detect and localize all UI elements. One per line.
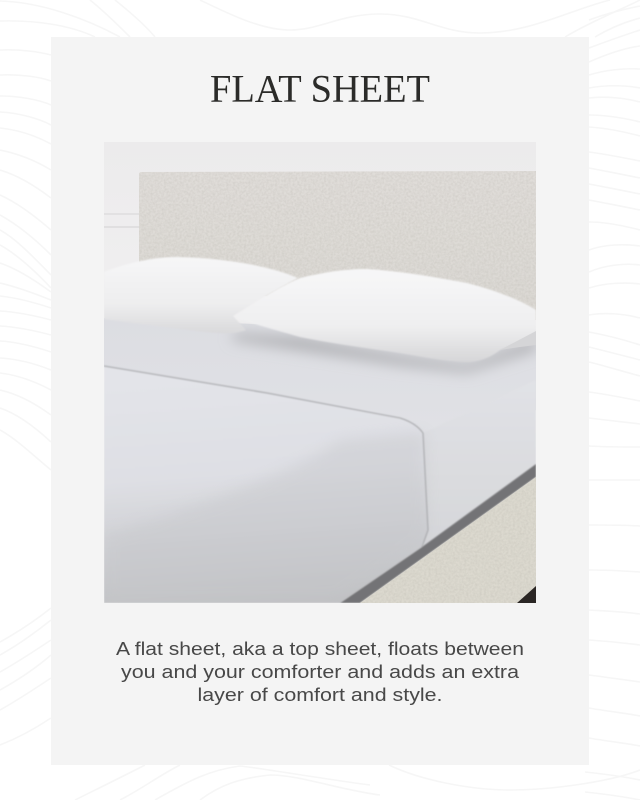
photo: bed with flat sheet	[104, 142, 536, 603]
description text: you and your comforter and adds an extra	[121, 662, 520, 682]
pillow shadow	[233, 333, 536, 372]
bed base	[360, 477, 536, 603]
description text	[116, 639, 524, 705]
dark gap under mattress	[340, 464, 536, 603]
bed top surface	[104, 318, 536, 432]
wall with moulding	[104, 142, 536, 228]
headboard	[139, 171, 536, 320]
pillowcase fold	[506, 331, 536, 349]
panel: light grey card	[51, 37, 589, 765]
dark floor corner	[517, 586, 536, 603]
flat sheet hem line	[104, 366, 428, 547]
description text: layer of comfort and style.	[198, 685, 442, 705]
title: FLAT SHEET	[210, 66, 430, 110]
sheet front surface	[104, 366, 428, 603]
right pillow	[235, 269, 536, 362]
sheet fold shading	[240, 436, 422, 502]
left pillow	[104, 257, 298, 333]
sheet side drop	[424, 410, 536, 546]
description text: A flat sheet, aka a top sheet, floats between	[116, 639, 524, 659]
